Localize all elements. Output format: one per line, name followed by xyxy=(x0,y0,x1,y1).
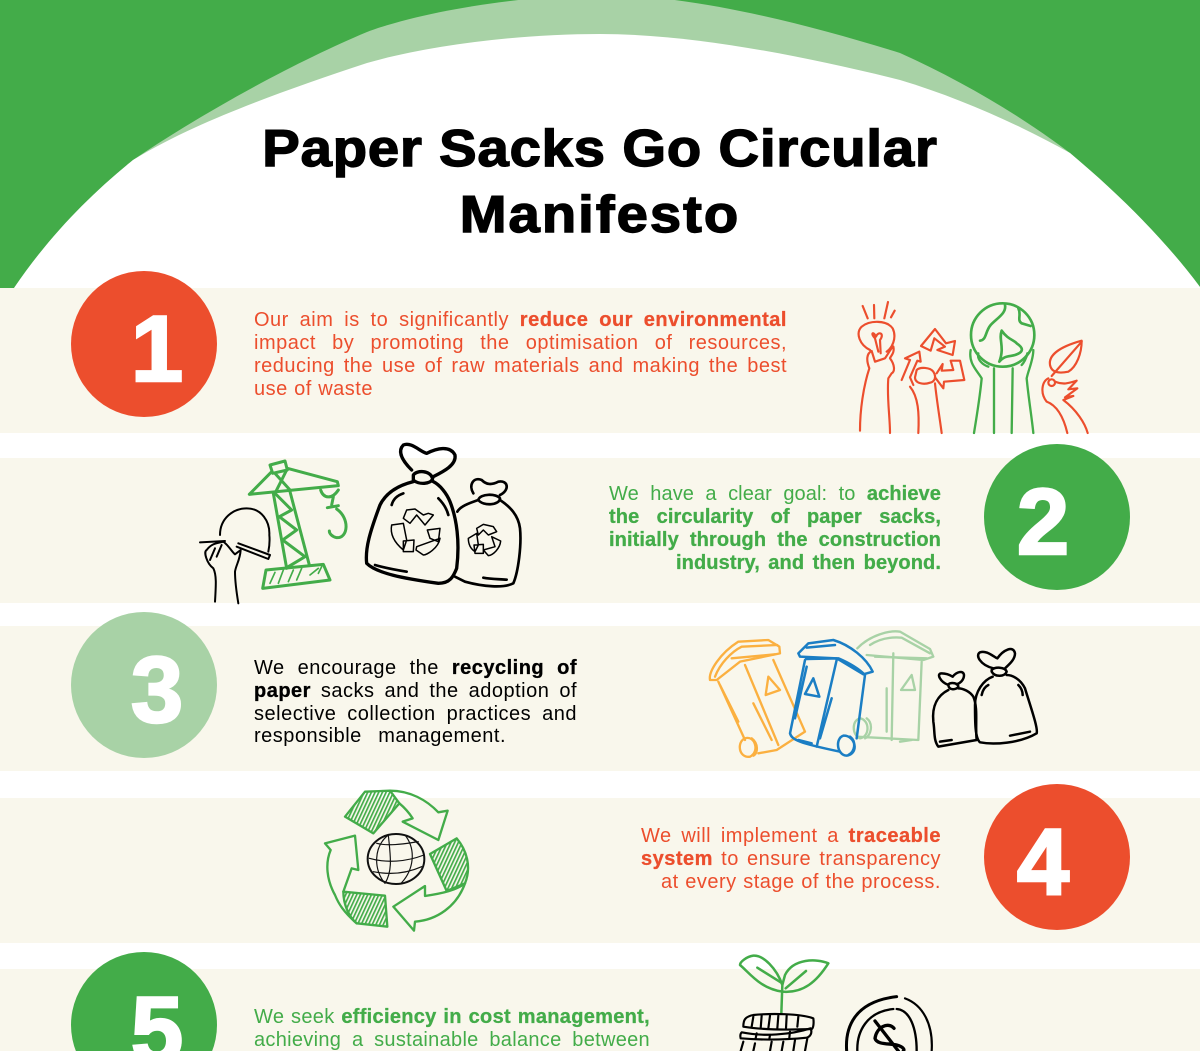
text block 2: We have a clear goal: to achieve xyxy=(609,483,941,505)
text block 1: Our aim is to significantly reduce our environmental xyxy=(254,309,787,331)
text block 1: reducing the use of raw materials and making the best xyxy=(254,355,787,377)
number badge 2 xyxy=(984,444,1130,590)
number badge 3 xyxy=(71,612,217,758)
icon: seedling on coins and dollar coin xyxy=(738,954,933,1051)
number badge 1: 1 xyxy=(131,296,183,401)
title xyxy=(262,120,938,244)
text block 5: achieving a sustainable balance between xyxy=(254,1029,650,1051)
text block 2 xyxy=(609,483,941,574)
text block 3: selective collection practices and xyxy=(254,703,577,725)
text block 2: initially through the construction xyxy=(609,529,941,551)
panel: item 4 xyxy=(0,798,1200,943)
number badge 4: 4 xyxy=(1017,809,1069,914)
title: Manifesto xyxy=(460,186,740,244)
icon: worker hat, crane and recycling bags xyxy=(199,442,522,604)
text block 1: use of waste xyxy=(254,378,373,400)
text block 2: the circularity of paper sacks, xyxy=(609,506,941,528)
text block 3: responsible management. xyxy=(254,725,506,747)
text block 5 xyxy=(254,1006,650,1051)
text block 1: impact by promoting the optimisation of resources, xyxy=(254,332,787,354)
text block 4 xyxy=(641,825,941,893)
icon: hands holding bulb, recycling sign, globe and leaf xyxy=(857,300,1089,434)
text block 4: system to ensure transparency xyxy=(641,848,941,870)
number badge 5 xyxy=(71,952,217,1051)
header background arcs xyxy=(0,0,1200,288)
panel: item 3 xyxy=(0,626,1200,771)
number badge 1 xyxy=(71,271,217,417)
icon: recycling bins and rubbish bags xyxy=(708,630,1038,758)
text block 2: industry, and then beyond. xyxy=(676,552,941,574)
text block 3: We encourage the recycling of xyxy=(254,657,577,679)
text block 3: paper sacks and the adoption of xyxy=(254,680,577,702)
text block 1 xyxy=(254,309,787,400)
panel: item 5 xyxy=(0,969,1200,1051)
number badge 3: 3 xyxy=(131,637,183,742)
text block 4: We will implement a traceable xyxy=(641,825,941,847)
panel: item 2 xyxy=(0,458,1200,603)
panel: item 1 xyxy=(0,288,1200,433)
title: Paper Sacks Go Circular xyxy=(262,120,938,178)
number badge 2: 2 xyxy=(1017,469,1069,574)
text block 4: at every stage of the process. xyxy=(661,871,941,893)
text block 5: We seek efficiency in cost management, xyxy=(254,1006,650,1028)
icon: recycling arrows around a globe xyxy=(324,790,470,932)
text block 3 xyxy=(254,657,577,747)
number badge 4 xyxy=(984,784,1130,930)
